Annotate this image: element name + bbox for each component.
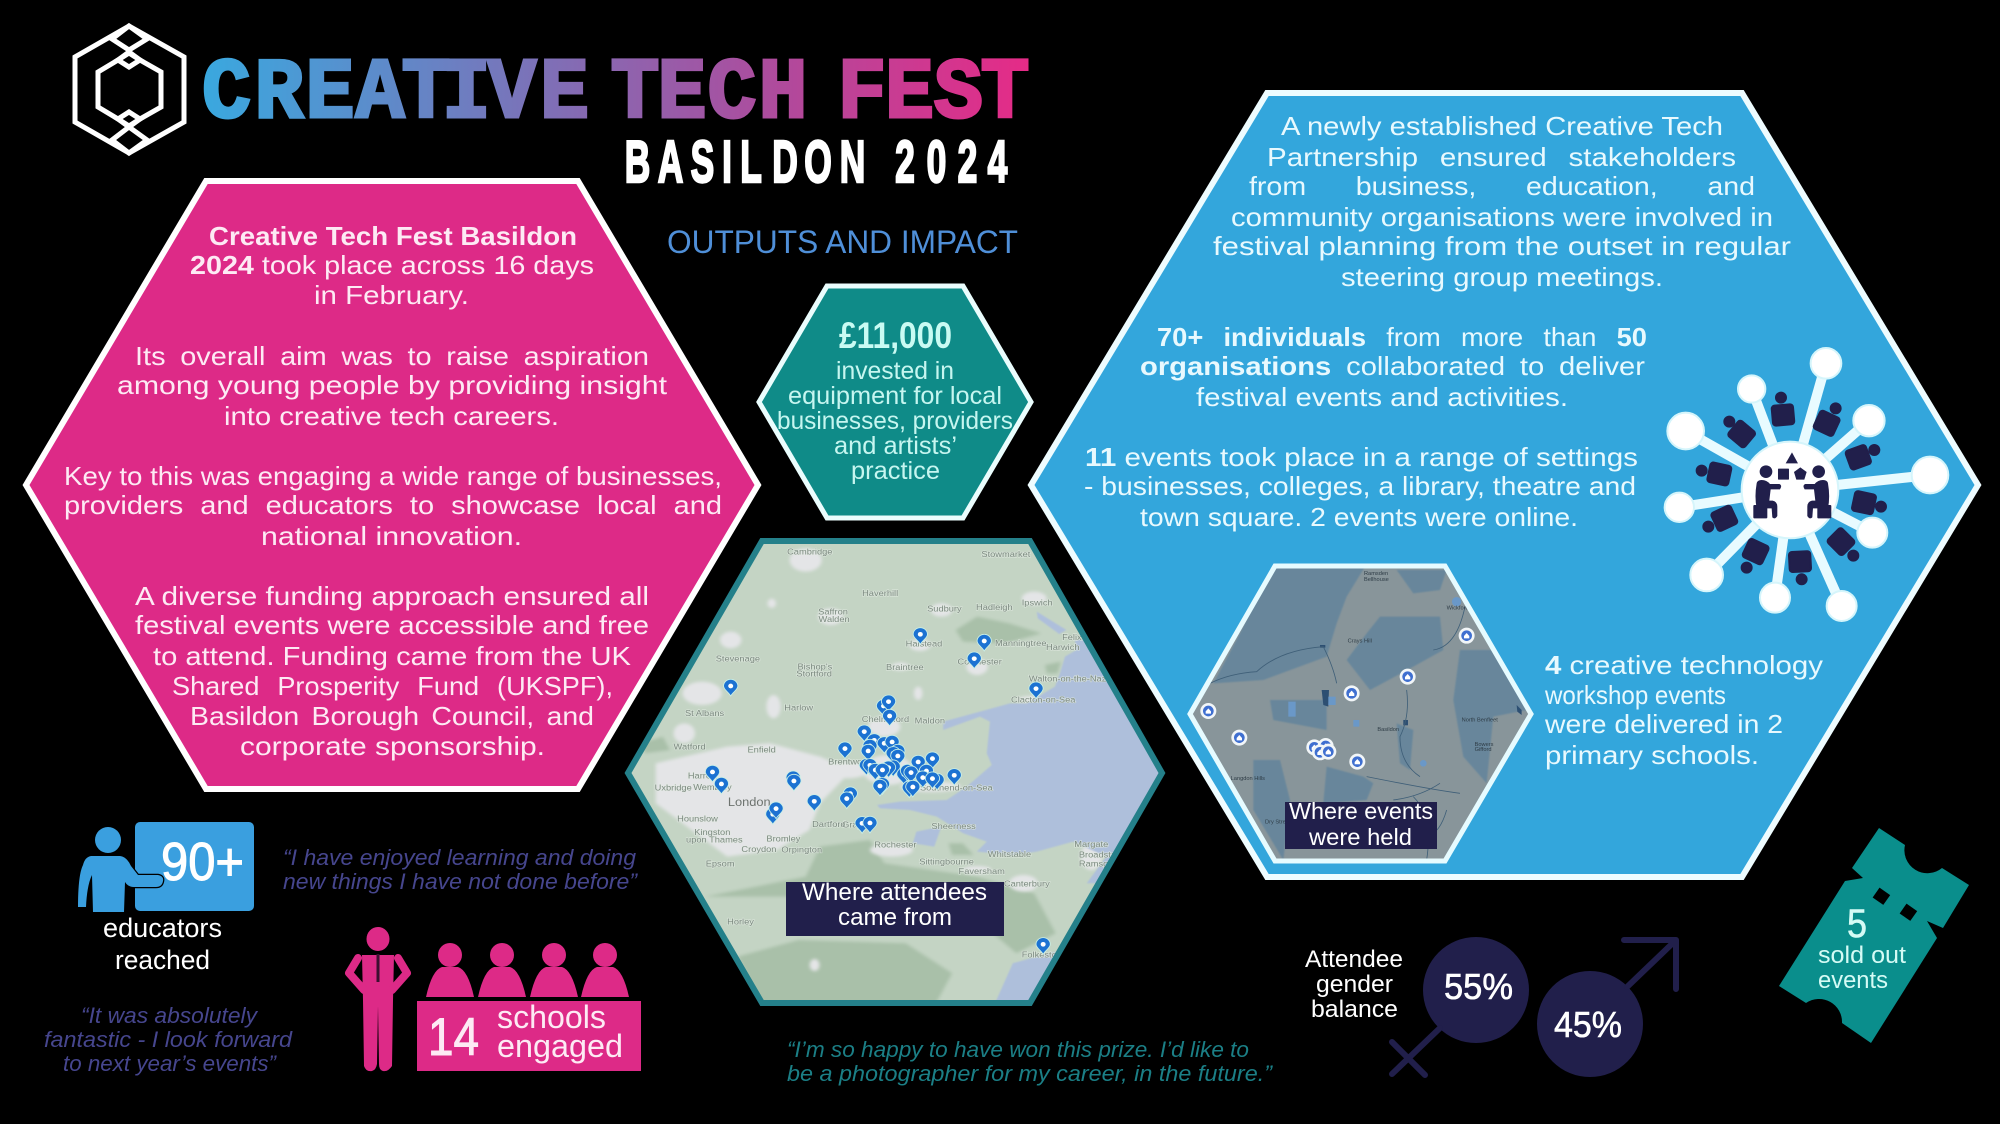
collaborators text: organisations collaborated to deliver bbox=[1140, 351, 1645, 381]
map: place labels: Margate bbox=[1074, 839, 1108, 849]
workshops text bbox=[1544, 650, 1823, 770]
overview text: festival events were accessible and free bbox=[135, 610, 649, 640]
map: place labels: Walden bbox=[819, 614, 850, 624]
panel: festival overview (pink hexagon) bbox=[26, 181, 758, 789]
map: place labels: Horley bbox=[727, 917, 754, 926]
icon: female symbol 55%: 55% bbox=[1444, 966, 1513, 1007]
caption: where events were held: Where events bbox=[1289, 798, 1433, 824]
event map: place labels: Crays Hill bbox=[1348, 639, 1372, 645]
event map image bbox=[1193, 568, 1528, 858]
label: educators reached bbox=[103, 913, 222, 975]
overview text: Its overall aim was to raise aspiration bbox=[135, 341, 649, 371]
map: place labels: Maldon bbox=[915, 716, 945, 725]
label: schools engaged: schools bbox=[497, 999, 606, 1035]
event map: place labels bbox=[1231, 571, 1498, 825]
quote: photographer bbox=[787, 1037, 1274, 1086]
label: attendee gender balance bbox=[1305, 946, 1403, 1023]
quote: enjoyed learning: new things I have not done before” bbox=[283, 869, 639, 894]
label: schools engaged bbox=[497, 999, 623, 1064]
events text: 11 events took place in a range of settings bbox=[1085, 442, 1638, 472]
overview text: among young people by providing insight bbox=[117, 370, 668, 400]
quote: absolutely fantastic: “It was absolutely bbox=[81, 1003, 259, 1028]
overview text: in February. bbox=[314, 280, 469, 310]
map: place labels: Dartford bbox=[812, 819, 846, 829]
label: attendee gender balance: gender bbox=[1316, 971, 1393, 998]
quote: enjoyed learning: “I have enjoyed learning and doing bbox=[283, 845, 637, 870]
investment description bbox=[777, 357, 1013, 485]
workshops text: workshop events bbox=[1544, 680, 1726, 710]
map: place labels: Kingston bbox=[694, 827, 730, 837]
map: place labels: Harwich bbox=[1046, 642, 1080, 652]
label: sold out events bbox=[1818, 942, 1906, 994]
pink hexagon shape bbox=[26, 181, 758, 789]
event map: water and roads bbox=[1320, 645, 1522, 725]
map: place labels: Felix bbox=[1062, 632, 1082, 642]
map: place labels: Harrow bbox=[688, 771, 718, 780]
map: place labels: Epsom bbox=[706, 859, 735, 869]
map: place labels bbox=[655, 547, 1126, 960]
icon: teacher figure bbox=[78, 827, 163, 912]
events text bbox=[1084, 442, 1638, 532]
icon: seated pupils bbox=[426, 943, 629, 997]
event map: place labels: Bellhouse bbox=[1364, 577, 1389, 583]
workshops text: 4 creative technology bbox=[1545, 650, 1823, 680]
quote: enjoyed learning bbox=[283, 845, 639, 894]
map: place labels: Stowmarket bbox=[981, 549, 1031, 559]
map: place labels: Stevenage bbox=[716, 654, 760, 663]
label: attendee gender balance: Attendee bbox=[1305, 946, 1403, 973]
caption: where attendees came from bbox=[786, 879, 1004, 936]
overview text: Creative Tech Fest Basildon bbox=[209, 221, 577, 251]
map: place labels: Broadstairs bbox=[1079, 850, 1126, 860]
heading: outputs and impact: OUTPUTS AND IMPACT bbox=[667, 224, 1018, 260]
map: place labels: Bromley bbox=[766, 834, 801, 844]
central figures and blocks bbox=[1753, 452, 1831, 518]
map: place labels: Halstead bbox=[906, 639, 942, 649]
partnership text: steering group meetings. bbox=[1341, 262, 1663, 292]
map: sea bbox=[878, 612, 1158, 1000]
map: place labels: Southend-on-Sea bbox=[920, 783, 993, 793]
investment description: businesses, providers bbox=[777, 407, 1013, 435]
number: 14: 14 bbox=[428, 1008, 479, 1067]
map of where events were held bbox=[1187, 564, 1534, 864]
label: attendee gender balance: balance bbox=[1311, 996, 1398, 1023]
caption: where attendees came from: came from bbox=[838, 904, 952, 931]
overview text: to attend. Funding came from the UK bbox=[153, 641, 632, 671]
partnership text: festival planning from the outset in regular bbox=[1213, 231, 1791, 261]
caption: where events were held bbox=[1285, 798, 1437, 850]
collaborators text: 70+ individuals from more than 50 bbox=[1157, 322, 1647, 352]
event map: place labels: Langdon Hills bbox=[1231, 776, 1265, 782]
title: Creative Tech Fest: CREATIVE TECH FEST bbox=[202, 46, 1030, 144]
icon: network of people around a table bbox=[1665, 348, 1948, 621]
number: 90+: 90+ bbox=[161, 832, 244, 892]
subtitle: Basildon 2024: BASILDON 2024 bbox=[625, 130, 1007, 195]
map: place labels: Ipswich bbox=[1022, 598, 1053, 607]
stat: 90+ educators reached bbox=[78, 822, 254, 975]
icon: male symbol 45%: 45% bbox=[1554, 1004, 1622, 1045]
overview text: national innovation. bbox=[261, 521, 522, 551]
map: place labels: Manningtree bbox=[995, 638, 1047, 648]
map: attendee pins bbox=[705, 628, 1050, 954]
icon: ticket bbox=[1779, 828, 1969, 1043]
map: place labels: Harlow bbox=[784, 703, 814, 713]
caption: where attendees came from: Where attendees bbox=[802, 879, 987, 906]
workshops text: were delivered in 2 bbox=[1544, 709, 1783, 739]
event map border bbox=[1190, 566, 1531, 861]
icon: male symbol 45% bbox=[1537, 940, 1676, 1077]
stat: 14 schools engaged bbox=[349, 927, 641, 1071]
event map: place labels: North Benfleet bbox=[1462, 718, 1498, 724]
map: place labels: Chelmsford bbox=[862, 714, 909, 724]
caption: where events were held: were held bbox=[1308, 824, 1412, 850]
desk bbox=[417, 1001, 641, 1071]
amount: £11,000 bbox=[839, 315, 952, 356]
overview text: into creative tech careers. bbox=[224, 401, 559, 431]
map: place labels: Hadleigh bbox=[976, 602, 1013, 612]
overview text: A diverse funding approach ensured all bbox=[135, 581, 649, 611]
events text: - businesses, colleges, a library, theatre and bbox=[1084, 471, 1636, 501]
label: schools engaged: engaged bbox=[497, 1028, 623, 1064]
overview text: corporate sponsorship. bbox=[240, 731, 545, 761]
surrounding people bbox=[1697, 393, 1886, 584]
event map: location markers bbox=[1200, 628, 1475, 770]
partnership text bbox=[1213, 111, 1791, 292]
overview text: Basildon Borough Council, and bbox=[190, 701, 594, 731]
events text: town square. 2 events were online. bbox=[1140, 502, 1578, 532]
spokes bbox=[1679, 363, 1930, 606]
map: place labels: Orpington bbox=[781, 845, 822, 855]
map: place labels: Saffron bbox=[818, 607, 848, 616]
label: sold out events: sold out bbox=[1818, 942, 1906, 969]
map: place labels: Colchester bbox=[957, 657, 1002, 666]
collaborators text: festival events and activities. bbox=[1196, 382, 1568, 412]
panel: partnership and events (blue hexagon) bbox=[1031, 93, 1978, 877]
map: place labels: Enfield bbox=[747, 745, 776, 754]
partnership text: Partnership ensured stakeholders bbox=[1267, 142, 1736, 172]
map: place labels: Croydon bbox=[741, 844, 776, 854]
map: place labels: Sittingbourne bbox=[919, 857, 974, 867]
overview text: providers and educators to showcase local and bbox=[64, 490, 722, 520]
map: place labels: London bbox=[728, 795, 771, 809]
partnership text: community organisations were involved in bbox=[1231, 202, 1773, 232]
event map: place labels: Wickford bbox=[1447, 605, 1469, 611]
number: 5: 5 bbox=[1847, 902, 1867, 946]
quote: photographer: be a photographer for my career, in the future.” bbox=[787, 1061, 1274, 1086]
logo: hexagon mark bbox=[75, 26, 184, 153]
investment description: invested in bbox=[836, 357, 954, 385]
map: place labels: Sheerness bbox=[931, 821, 976, 831]
map: place labels: Folkestone bbox=[1022, 950, 1067, 960]
map: dark woodland areas bbox=[641, 617, 1061, 1007]
event map: place labels: Basildon bbox=[1377, 727, 1399, 733]
investment description: and artists’ bbox=[834, 432, 957, 460]
label: educators reached: educators bbox=[103, 913, 222, 943]
blue hexagon shape bbox=[1031, 93, 1978, 877]
investment description: equipment for local bbox=[788, 382, 1002, 410]
event map: place labels: Ramsden bbox=[1364, 571, 1388, 577]
label: sold out events: events bbox=[1818, 967, 1888, 994]
panel: £11,000 invested (teal hexagon) bbox=[759, 286, 1031, 518]
map: place labels: Rochester bbox=[874, 840, 917, 850]
map: place labels: St Albans bbox=[685, 708, 725, 718]
map: place labels: Canterbury bbox=[1004, 879, 1050, 889]
map: place labels: Haverhill bbox=[862, 588, 898, 598]
map: place labels: upon Thames bbox=[686, 835, 743, 845]
event map: place labels: Gifford bbox=[1475, 747, 1492, 753]
map: place labels: Whitstable bbox=[988, 849, 1031, 859]
map: place labels: Watford bbox=[674, 742, 706, 751]
partnership text: A newly established Creative Tech bbox=[1281, 111, 1723, 141]
overview text: Key to this was engaging a wide range of businesses, bbox=[64, 461, 722, 491]
map: place labels: Brentwood bbox=[828, 757, 873, 766]
map: place labels: Wembley bbox=[693, 782, 732, 792]
map: place labels: Hounslow bbox=[677, 814, 718, 824]
overview text: 2024 took place across 16 days bbox=[190, 250, 594, 280]
map: place labels: Bishop's bbox=[797, 662, 833, 671]
event map: shaded land bbox=[1213, 564, 1527, 860]
stat: 5 sold out events ticket bbox=[1779, 828, 1969, 1043]
map: place labels: Stortford bbox=[796, 669, 832, 679]
panel: map of where attendees came from bbox=[620, 530, 1191, 1010]
investment description: practice bbox=[851, 457, 940, 485]
event map: place labels: Bowers bbox=[1475, 742, 1494, 748]
map: place labels: Clacton-on-Sea bbox=[1011, 695, 1075, 705]
icon: female symbol 55% bbox=[1392, 937, 1529, 1075]
workshops text: primary schools. bbox=[1545, 740, 1759, 770]
map: urban areas bbox=[656, 548, 1102, 971]
overview text bbox=[64, 221, 722, 761]
quote: absolutely fantastic: to next year’s events” bbox=[63, 1051, 278, 1076]
collaborators text bbox=[1140, 322, 1647, 412]
overview text: Shared Prosperity Fund (UKSPF), bbox=[172, 671, 613, 701]
quote: absolutely fantastic: fantastic - I look forward bbox=[44, 1027, 293, 1052]
icon: presentation board bbox=[135, 822, 254, 911]
event map: place labels: Dry Street bbox=[1265, 819, 1291, 825]
partnership text: from business, education, and bbox=[1249, 171, 1755, 201]
quote: photographer: “I’m so happy to have won this prize. I’d like to bbox=[787, 1037, 1249, 1062]
label: educators reached: reached bbox=[115, 945, 210, 975]
map: place labels: Walton-on-the-Naze bbox=[1029, 674, 1112, 684]
quote: absolutely fantastic bbox=[44, 1003, 293, 1076]
teal hexagon shape bbox=[759, 286, 1031, 518]
map: place labels: Braintree bbox=[886, 662, 924, 672]
map image bbox=[632, 544, 1158, 1000]
map border bbox=[628, 541, 1162, 1003]
map: place labels: Sudbury bbox=[927, 604, 962, 614]
icon: standing teacher bbox=[349, 927, 407, 1071]
map: place labels: Grays bbox=[842, 820, 867, 830]
map: place labels: Ramsgate bbox=[1079, 859, 1121, 869]
map: place labels: Faversham bbox=[959, 866, 1005, 876]
map: place labels: Cambridge bbox=[787, 547, 832, 557]
nodes bbox=[1665, 348, 1948, 621]
map: place labels: Uxbridge bbox=[655, 783, 692, 792]
stat: attendee gender balance bbox=[1305, 937, 1676, 1077]
